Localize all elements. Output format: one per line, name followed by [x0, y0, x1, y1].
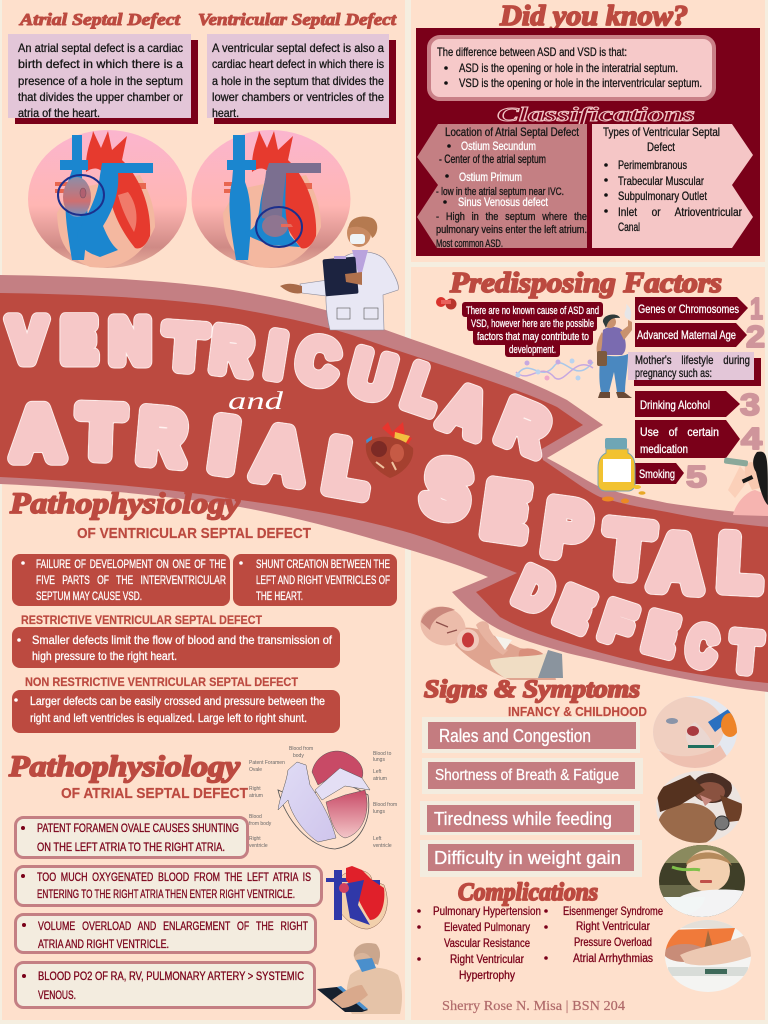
title: Ventricular Atrial Septal Defect: T — [601, 506, 655, 594]
chart: labelled heart diagram: lungs — [373, 809, 385, 815]
icon: pregnant woman smoking — [597, 304, 632, 398]
subheading: non restrictive VSD: NON RESTRICTIVE VENTRICULAR SEPTAL DEFECT — [25, 675, 299, 689]
box: patent foramen ovale: PATENT FORAMEN OVALE CAUSES SHUNTING — [37, 821, 239, 835]
chart: labelled heart diagram: body — [293, 753, 304, 759]
chart: labelled heart diagram: atrium — [249, 793, 263, 799]
callout: no known cause: VSD, however here are the possible — [471, 318, 594, 330]
tag: genes — [635, 297, 748, 320]
list: complications right: Right Ventricular — [576, 919, 650, 933]
panel: non restrictive VSD text: right and left ventricles is equalized. Large left to right shunt. — [30, 711, 307, 725]
title: Ventricular Atrial Septal Defect: F — [595, 590, 641, 656]
title: Ventricular Atrial Septal Defect: D — [508, 556, 562, 624]
title: Ventricular Atrial Septal Defect: A — [250, 411, 310, 498]
box: volume overload: VOLUME OVERLOAD AND ENLARGEMENT OF THE RIGHT — [38, 919, 308, 933]
panel: location of atrial septal defect: Ostium Primum — [459, 170, 522, 184]
title: Ventricular Atrial Septal Defect: N — [110, 308, 150, 376]
panel: types of ventricular septal defect: Inlet or Atrioventricular — [618, 205, 742, 219]
tag: medication: medication — [640, 442, 688, 456]
list: complications left: Pulmonary Hypertension — [433, 904, 541, 918]
panel: atrial definition: presence of a hole in the septum — [18, 74, 183, 88]
title: Ventricular Atrial Septal Defect: T — [163, 313, 207, 383]
list: complications left: Elevated Pulmonary — [444, 920, 530, 934]
tag: smoking — [635, 463, 684, 484]
title: Ventricular Atrial Septal Defect: L — [320, 426, 376, 512]
list: complications right: Eisenmenger Syndrome — [563, 904, 663, 918]
number 5: 5 — [686, 459, 707, 494]
panel: ventricular definition: A ventricular septal defect is also a — [212, 41, 384, 55]
bar: shortness of breath: Shortness of Breath & Fatigue — [435, 767, 619, 784]
panel: types of ventricular septal defect: Trabecular Muscular — [618, 174, 704, 188]
heading: complications: Complications — [458, 879, 598, 906]
bar: weight gain: Difficulty in weight gain — [434, 848, 621, 868]
icon: DNA strand — [516, 358, 593, 380]
chart: labelled heart diagram: Left — [373, 769, 382, 775]
box: patent foramen ovale — [16, 818, 248, 858]
title: Ventricular Atrial Septal Defect: A — [13, 393, 63, 474]
chart: labelled heart diagram: Blood from — [289, 746, 313, 752]
chart: labelled heart diagram: ventricle — [249, 843, 268, 849]
tag: drinking alcohol: Drinking Alcohol — [640, 398, 710, 412]
chart: labelled heart diagram: Left — [373, 836, 382, 842]
credit: author: Sherry Rose N. Misa | BSN 204 — [442, 999, 625, 1014]
subheading: infancy and childhood: INFANCY & CHILDHOOD — [508, 704, 647, 719]
list: risk factors — [628, 291, 765, 494]
chart: labelled heart diagram: from body — [249, 821, 272, 827]
panel: atrial definition: that divides the upper chamber or — [18, 90, 183, 104]
box: oxygenated blood — [16, 866, 322, 906]
title: Ventricular Atrial Septal Defect: I — [207, 403, 241, 487]
panel: types of ventricular septal defect — [592, 124, 753, 248]
panel: ventricular definition: cardiac heart defect in which there is — [212, 57, 384, 71]
panel: ventricular definition — [207, 34, 396, 124]
panel: location of atrial septal defect: - High in the septum where the — [436, 211, 587, 223]
number 3: 3 — [740, 387, 760, 422]
panel: atrial definition: An atrial septal defect is a cardiac — [18, 41, 183, 55]
title: Ventricular Atrial Septal Defect: U — [343, 336, 401, 414]
photo: infant examined — [656, 771, 742, 843]
subheading: of atrial septal defect: OF ATRIAL SEPTAL DEFECT — [61, 785, 248, 802]
chart: labelled heart diagram: Blood — [249, 814, 262, 820]
panel: ventricular definition: lower chambers or ventricles of the — [212, 90, 384, 104]
panel: types of ventricular septal defect: Types of Ventricular Septal — [603, 125, 720, 139]
bar: rales: Rales and Congestion — [439, 726, 591, 746]
callout: difference between ASD and VSD: VSD is the opening or hole in the interventricular septum. — [459, 76, 702, 90]
panel: restrictive VSD text: high pressure to the right heart. — [32, 649, 177, 663]
panel: ventricular definition: a hole in the septum that divides the — [212, 74, 384, 88]
list: symptoms — [420, 717, 643, 877]
title: Ventricular Atrial Septal Defect: R — [208, 315, 256, 388]
box: blood PO2: VENOUS. — [38, 988, 76, 1002]
bar: rales — [422, 717, 640, 753]
callout: difference between ASD and VSD: The difference between ASD and VSD is that: — [437, 45, 627, 59]
icon: pill bottle — [598, 438, 646, 504]
heading: pathophysiology of ASD: Pathophysiology — [8, 750, 241, 783]
panel: non restrictive VSD text: Larger defects can be easily crossed and pressure between the — [30, 694, 325, 708]
callout: no known cause: factors that may contribute to — [477, 331, 589, 343]
chart: labelled heart diagram: ventricle — [373, 843, 392, 849]
panel: location of atrial septal defect: Ostium Secundum — [461, 139, 536, 153]
box: oxygenated blood: TOO MUCH OXYGENATED BLOOD FROM THE LEFT ATRIA IS — [37, 870, 311, 884]
banner ribbon — [0, 275, 768, 692]
box: volume overload — [16, 914, 316, 952]
icon: doctor with clipboard — [280, 216, 398, 330]
title: Ventricular Atrial Septal Defect: E — [549, 576, 601, 642]
icon: woman drinking — [724, 452, 768, 516]
box: mother's lifestyle — [628, 352, 761, 386]
icon: small heart — [326, 866, 387, 929]
chart: labelled heart diagram: Blood from — [373, 802, 397, 808]
title: Ventricular Atrial Septal Defect: R — [490, 387, 558, 469]
chart: labelled heart diagram: atrium — [373, 776, 387, 782]
bar: tiredness — [420, 801, 640, 835]
icon: heart with ventricular septal defect — [192, 130, 350, 268]
title: Ventricular Atrial Septal Defect: V — [8, 307, 46, 375]
box: oxygenated blood: ENTERING TO THE RIGHT ATRIA THEN ENTER RIGHT VENTRICLE. — [37, 887, 295, 901]
heading: signs and symptoms: Signs & Symptoms — [424, 676, 640, 703]
panel: non restrictive VSD text — [12, 690, 340, 733]
title: Ventricular Atrial Septal Defect: S — [418, 445, 476, 535]
icon: anatomical heart — [366, 422, 413, 478]
tag: maternal age — [635, 323, 747, 347]
panel: types of ventricular septal defect: Defect — [647, 140, 676, 154]
title: Ventricular Atrial Septal Defect: T — [730, 622, 762, 683]
panel: VSD shunt creation: LEFT AND RIGHT VENTRICLES OF — [256, 573, 390, 587]
heading: ventricular septal defect: Ventricular Septal Defect — [198, 10, 397, 29]
bar: weight gain — [420, 840, 642, 877]
chart: labelled heart diagram: Ovale — [249, 767, 262, 773]
panel: did you know and classifications — [416, 28, 760, 256]
panel: atrial definition — [8, 34, 198, 124]
chart: labelled heart diagram: Right — [249, 786, 261, 792]
subheading: restrictive VSD: RESTRICTIVE VENTRICULAR SEPTAL DEFECT — [21, 613, 263, 627]
panel: atrial definition: birth defect in which there is a — [18, 57, 183, 71]
panel: location of atrial septal defect: pulmonary veins enter the left atrium. — [436, 224, 587, 236]
panel: VSD shunt creation — [233, 554, 397, 606]
list: complications left: Vascular Resistance — [444, 936, 530, 950]
list: complications right: Pressure Overload — [574, 935, 652, 949]
icon: heart with atrial septal defect — [28, 130, 187, 268]
box: blood PO2: BLOOD PO2 OF RA, RV, PULMONARY ARTERY > SYSTEMIC — [38, 969, 304, 983]
icon: push pin — [436, 297, 456, 310]
heading: did you know: Did you know? — [499, 0, 688, 32]
chart: labelled heart diagram: Right — [249, 836, 261, 842]
panel: location of atrial septal defect: - Center of the atrial septum — [439, 152, 546, 166]
number 4: 4 — [741, 421, 763, 456]
number 1: 1 — [750, 291, 763, 326]
title: Ventricular Atrial Septal Defect: E — [479, 467, 533, 555]
list: complications right: Atrial Arrhythmias — [573, 951, 653, 965]
photo: baby on scale — [665, 920, 751, 992]
panel: restrictive VSD text — [12, 627, 340, 668]
box: patent foramen ovale: ON THE LEFT ATRIA TO THE RIGHT ATRIA. — [37, 840, 225, 854]
title: Ventricular Atrial Septal Defect: L — [396, 352, 449, 427]
panel: location of atrial septal defect: Location of Atrial Septal Defect — [445, 125, 580, 139]
heading: pathophysiology of VSD: Pathophysiology — [9, 487, 241, 520]
callout: difference between ASD and VSD: ASD is the opening or hole in the interatrial septum. — [459, 61, 678, 75]
tag: smoking: Smoking — [639, 467, 675, 481]
bar: tiredness: Tiredness while feeding — [434, 809, 612, 829]
icon: doctor reading — [317, 943, 402, 1014]
tag: drinking alcohol — [635, 391, 740, 417]
title: Ventricular Atrial Septal Defect: L — [717, 521, 763, 607]
title: Ventricular Atrial Septal Defect: C — [683, 615, 721, 678]
box: blood PO2 — [16, 962, 314, 1008]
heading: classifications: Classifications — [497, 104, 695, 126]
list: complications left — [417, 904, 541, 982]
tag: maternal age: Advanced Maternal Age — [637, 328, 736, 342]
panel: types of ventricular septal defect: Canal — [618, 220, 640, 234]
title connector: and: and — [228, 388, 284, 415]
title: Ventricular Atrial Septal Defect: T — [78, 393, 124, 473]
list: complications right — [544, 904, 663, 965]
chart: labelled heart diagram: Blood to — [373, 751, 392, 757]
callout: no known cause: There are no known cause of ASD and — [466, 305, 599, 317]
title: Ventricular Atrial Septal Defect: R — [136, 395, 188, 480]
panel: ventricular definition: heart. — [212, 106, 239, 120]
panel: location of atrial septal defect: Sinus Venosus defect — [458, 195, 549, 209]
icon: newborn with heart — [415, 600, 563, 680]
subheading: of ventricular septal defect: OF VENTRICULAR SEPTAL DEFECT — [77, 525, 311, 542]
title: Ventricular Atrial Septal Defect: A — [433, 370, 497, 451]
tag: medication — [635, 420, 740, 458]
title: Ventricular Atrial Septal Defect: I — [262, 320, 290, 390]
panel: location of atrial septal defect — [417, 124, 587, 250]
panel: VSD failure of development: FIVE PARTS OF THE INTERVENTRICULAR — [36, 573, 226, 587]
panel: VSD failure of development — [12, 554, 230, 606]
panel: atrial definition: atria of the heart. — [18, 106, 100, 120]
box: volume overload: ATRIA AND RIGHT VENTRICLE. — [38, 937, 169, 951]
title: Ventricular Atrial Septal Defect — [8, 307, 763, 683]
callout: difference between ASD and VSD — [429, 37, 714, 99]
bar: shortness of breath — [422, 758, 643, 794]
panel: VSD shunt creation: THE HEART. — [256, 589, 303, 603]
panel: VSD failure of development: SEPTUM MAY CAUSE VSD. — [36, 589, 142, 603]
title: Ventricular Atrial Septal Defect: A — [649, 520, 705, 607]
box: mother's lifestyle: pregnancy such as: — [635, 366, 712, 380]
panel: VSD failure of development: FAILURE OF DEVELOPMENT ON ONE OF THE — [36, 557, 226, 571]
heading: predisposing factors: Predisposing Factors — [449, 268, 722, 299]
chart: labelled heart diagram — [249, 746, 397, 849]
callout: no known cause — [462, 302, 603, 357]
tag: genes: Genes or Chromosomes — [638, 302, 739, 316]
title: Ventricular Atrial Septal Defect: P — [539, 484, 595, 573]
photo: baby with nebulizer — [653, 696, 737, 768]
list: complications left: Hypertrophy — [459, 968, 515, 982]
title: Ventricular Atrial Septal Defect: C — [292, 324, 344, 399]
heading: atrial septal defect: Atrial Septal Defect — [19, 10, 181, 29]
callout: no known cause: development. — [509, 344, 556, 356]
panel: location of atrial septal defect: - low in the atrial septum near IVC. — [436, 186, 564, 198]
photo: child refusing food — [659, 845, 745, 917]
panel: VSD shunt creation: SHUNT CREATION BETWEEN THE — [256, 557, 390, 571]
panel: types of ventricular septal defect: Perimembranous — [618, 158, 687, 172]
title: Ventricular Atrial Septal Defect: E — [62, 307, 96, 375]
chart: labelled heart diagram: Patent Foramen — [249, 760, 285, 766]
list: ASD points — [16, 818, 322, 1008]
chart: labelled heart diagram: lungs — [373, 757, 385, 763]
panel: types of ventricular septal defect: Subpulmonary Outlet — [618, 189, 708, 203]
panel: restrictive VSD text: Smaller defects limit the flow of blood and the transmission of — [32, 633, 333, 647]
number 2: 2 — [746, 319, 765, 354]
title: Ventricular Atrial Septal Defect: E — [639, 603, 682, 667]
list: complications left: Right Ventricular — [450, 952, 524, 966]
panel: location of atrial septal defect: Most common ASD. — [436, 238, 503, 250]
tag: medication: Use of certain — [640, 425, 719, 439]
